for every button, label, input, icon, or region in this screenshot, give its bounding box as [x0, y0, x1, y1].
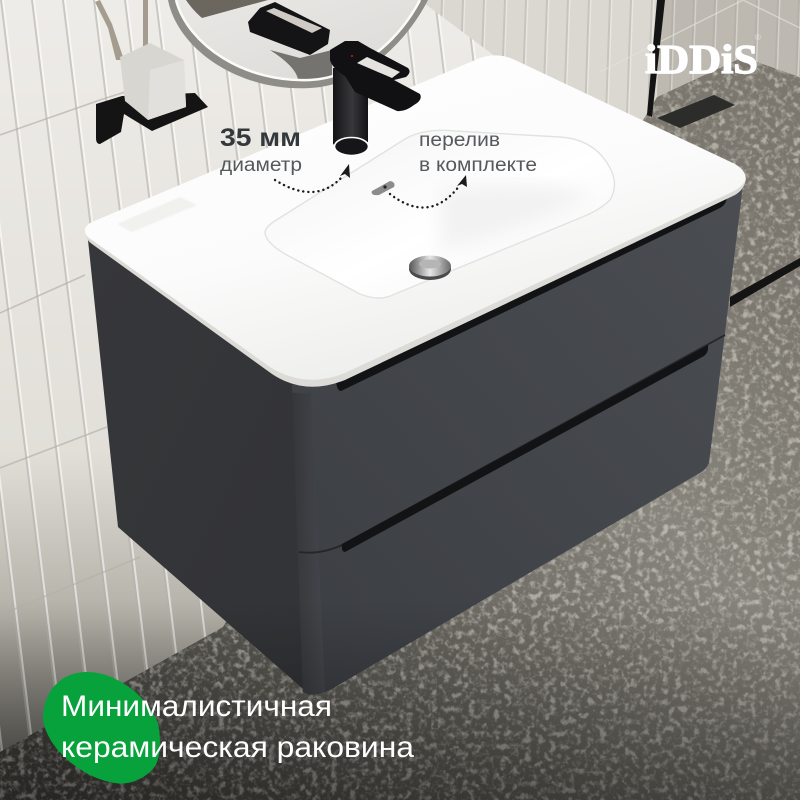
overflow	[372, 181, 394, 195]
bottom shading	[0, 600, 800, 800]
wall tiles, left	[0, 0, 600, 752]
overflow label line 2: в комплекте	[419, 155, 537, 176]
35 mm value: 35 мм	[220, 124, 301, 152]
overflow label line 1: перелив	[419, 130, 500, 151]
drawer seam	[299, 335, 725, 553]
annotation: diameter	[220, 124, 302, 176]
upper drawer handle	[336, 196, 727, 391]
caption: керамическая раковина	[61, 731, 415, 764]
round mirror	[168, 0, 428, 88]
cabinet front	[292, 185, 743, 695]
black bracket	[96, 93, 208, 144]
caption: Минималистичная	[61, 690, 332, 723]
countertop edge	[85, 60, 746, 387]
annotation: overflow	[419, 130, 537, 176]
toothbrush holder with glass	[95, 0, 208, 144]
cabinet side panel	[88, 240, 310, 695]
diameter label: диаметр	[220, 155, 302, 176]
vanity cabinet	[88, 185, 743, 695]
arrow from overflow	[390, 175, 467, 208]
faucet base ring	[334, 138, 368, 156]
brand logo: iDDiS	[645, 36, 758, 82]
basin	[265, 130, 614, 298]
frosted glass	[120, 43, 186, 120]
countertop	[85, 55, 746, 380]
arrow to faucet base	[275, 164, 350, 192]
reflected faucet	[248, 2, 330, 55]
floor drain	[657, 95, 735, 128]
soap dish shadow	[117, 197, 197, 232]
glass partition frame	[647, 0, 800, 307]
toothbrushes	[95, 0, 124, 60]
ceramic sink	[85, 55, 746, 387]
wall tiles, far right	[420, 0, 800, 125]
rounded corner	[291, 392, 325, 694]
green blob	[43, 672, 160, 784]
caption	[61, 690, 415, 764]
faucet	[330, 41, 421, 156]
drain	[409, 256, 451, 280]
lower drawer handle	[342, 345, 708, 552]
brand logo: ®	[755, 33, 761, 42]
